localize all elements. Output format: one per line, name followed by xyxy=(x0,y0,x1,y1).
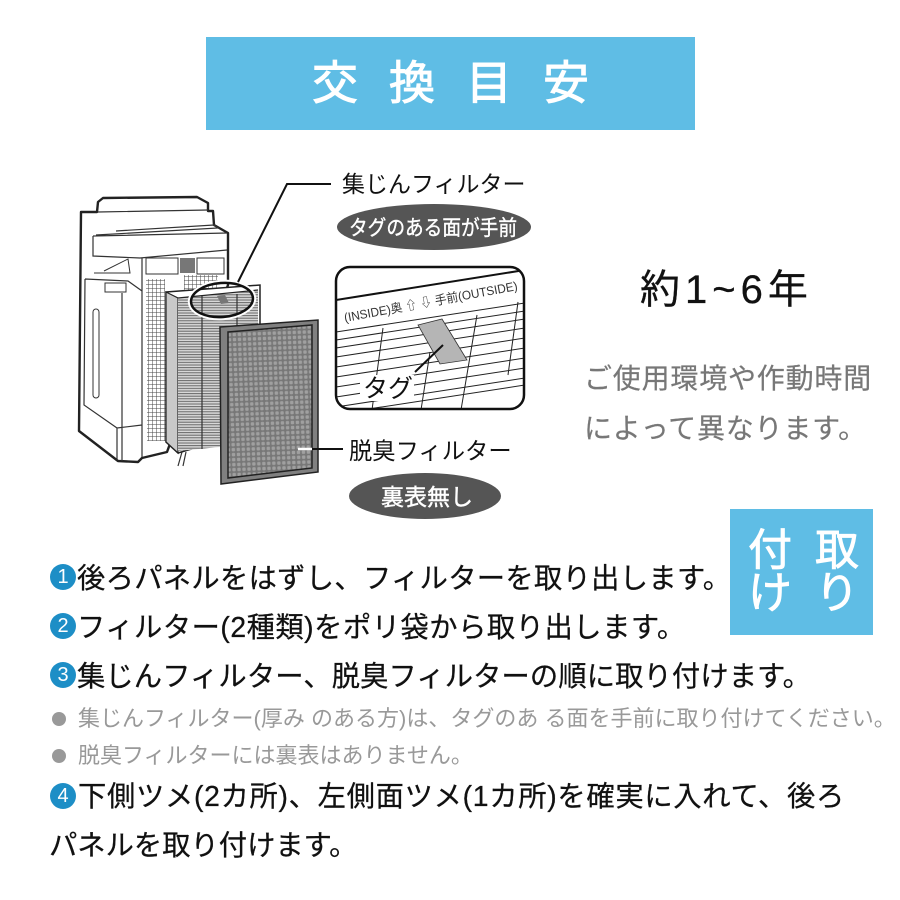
replacement period: 約1~6年 xyxy=(640,268,813,312)
step 4: 下側ツメ(2カ所)、左側面ツメ(1カ所)を確実に入れて、後ろ xyxy=(78,780,845,812)
highlight ellipse on tag xyxy=(188,279,256,321)
air purifier body xyxy=(79,197,228,466)
deodorizing filter xyxy=(220,320,318,484)
label: dust filter: 集じんフィルター xyxy=(342,171,526,197)
step 3: 3 xyxy=(57,664,69,686)
usage note line 2: によって異なります。 xyxy=(584,413,867,444)
detail panel: tag close-up xyxy=(336,267,525,414)
step 2: 2 xyxy=(57,615,69,637)
installation badge: 取 xyxy=(815,526,859,575)
pill: tag side forward: タグのある面が手前 xyxy=(349,217,517,240)
tag leader line xyxy=(415,345,443,372)
usage note: ご使用環境や作動時間 xyxy=(584,363,872,394)
step 1: 後ろパネルをはずし、フィルターを取り出します。 xyxy=(77,562,731,594)
filter illustration xyxy=(78,171,531,519)
step 4: パネルを取り付けます。 xyxy=(49,829,357,861)
tag swatch xyxy=(418,319,467,364)
pill: no front or back xyxy=(349,473,501,519)
leader line: dust filter xyxy=(238,184,331,282)
note: deodorizing filter: 脱臭フィルターには裏表はありません。 xyxy=(78,743,473,768)
installation badge: け xyxy=(748,569,792,618)
label: deodorizing filter: 脱臭フィルター xyxy=(349,438,512,464)
pill: no front or back: 裏表無し xyxy=(381,484,473,510)
title banner: 交換目安 xyxy=(312,57,620,109)
installation badge xyxy=(730,509,873,635)
leader line: deodorizing filter xyxy=(298,448,343,450)
dust collection filter xyxy=(166,285,260,453)
step 3: 集じんフィルター、脱臭フィルターの順に取り付けます。 xyxy=(77,660,811,692)
detail panel: tag close-up: (INSIDE)奥 ⇧ ⇩ 手前(OUTSIDE) xyxy=(343,278,519,325)
pill: tag side forward xyxy=(337,204,531,250)
step 4 xyxy=(49,780,845,861)
installation badge: り xyxy=(815,569,859,618)
note: dust filter: 集じんフィルター(厚み のある方)は、タグのあ る面を手前に取り付けてください。 xyxy=(78,706,896,731)
step 4: 4 xyxy=(57,785,69,807)
step 2: フィルター(2種類)をポリ袋から取り出します。 xyxy=(77,611,686,643)
title banner xyxy=(206,37,695,130)
step 1: 1 xyxy=(57,566,69,588)
installation badge: 付 xyxy=(748,526,792,575)
label: tag: タグ xyxy=(363,375,413,403)
